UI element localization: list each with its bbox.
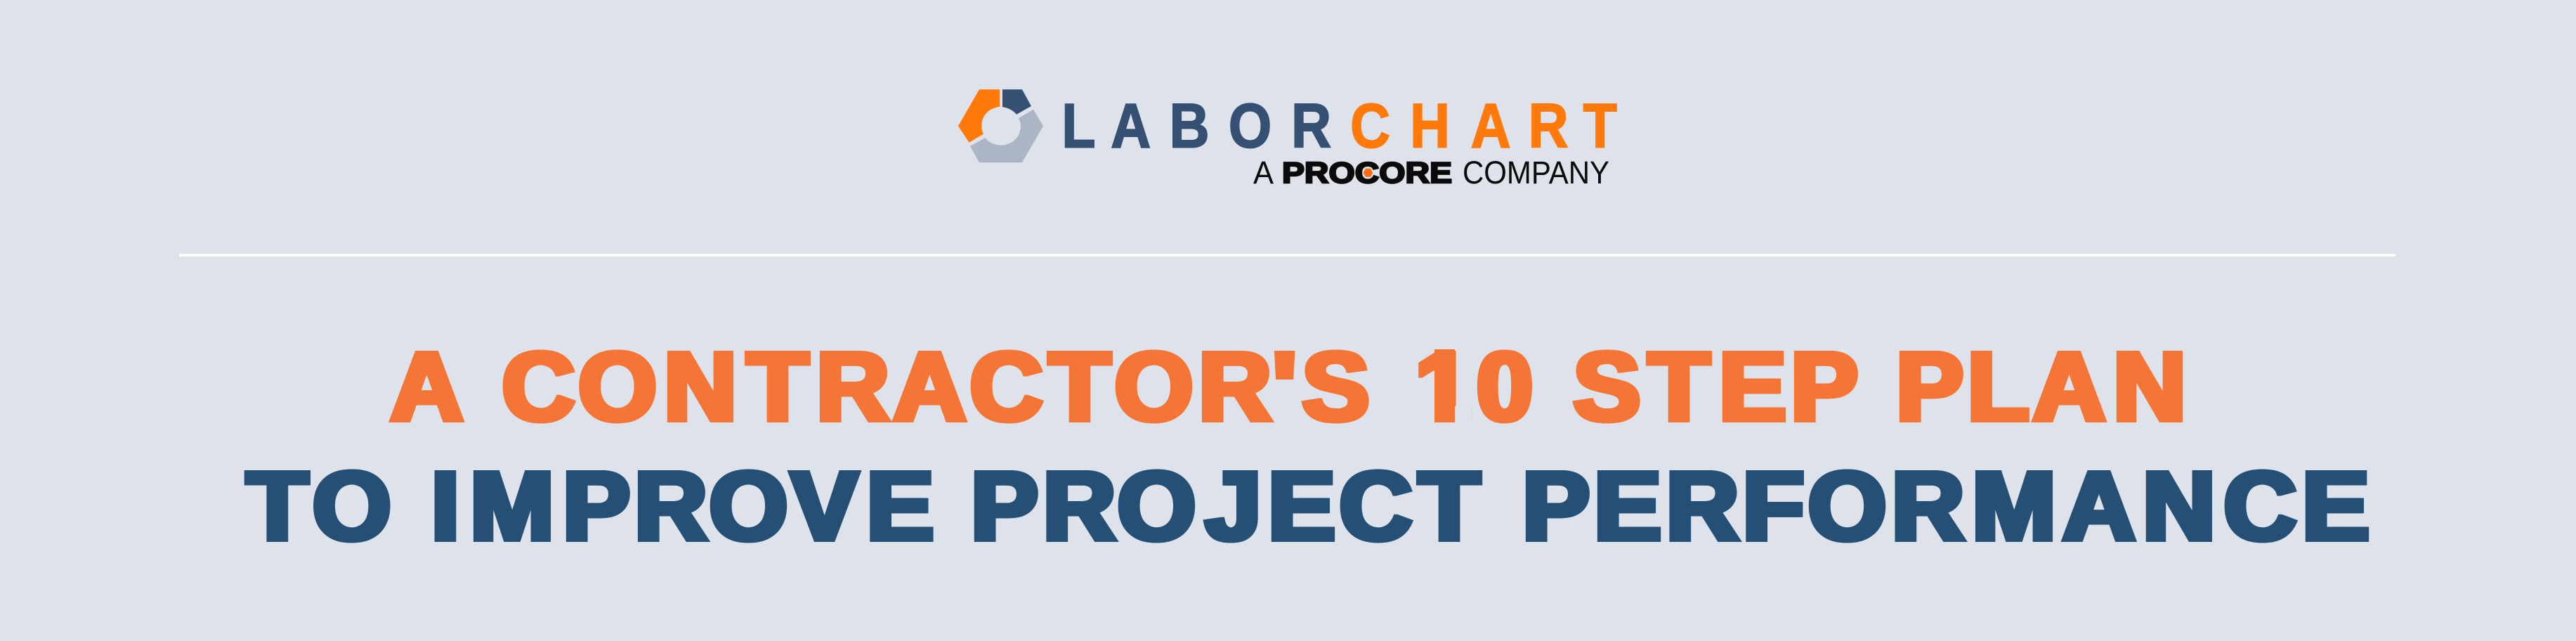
tagline: A Procore company: A xyxy=(1253,155,1274,190)
tagline: A Procore company xyxy=(1253,155,1609,190)
wordmark: LaborChart xyxy=(1061,91,1617,161)
tagline: A Procore company: COMPANY xyxy=(1463,155,1609,190)
title xyxy=(247,332,2369,561)
Procore wordmark: PROCORE xyxy=(1282,156,1452,189)
icon: segmented hexagon mark xyxy=(958,89,1043,162)
wordmark: CHART: CHART xyxy=(1350,91,1617,161)
logo: LaborChart, a Procore company xyxy=(958,89,1617,190)
icon: Procore orange hexagon xyxy=(1363,169,1373,177)
title line 1: A CONTRACTOR'S 10 STEP PLAN xyxy=(391,332,2186,441)
wordmark: LABOR: LABOR xyxy=(1061,91,1331,161)
title line 2: TO IMPROVE PROJECT PERFORMANCE xyxy=(247,451,2369,561)
